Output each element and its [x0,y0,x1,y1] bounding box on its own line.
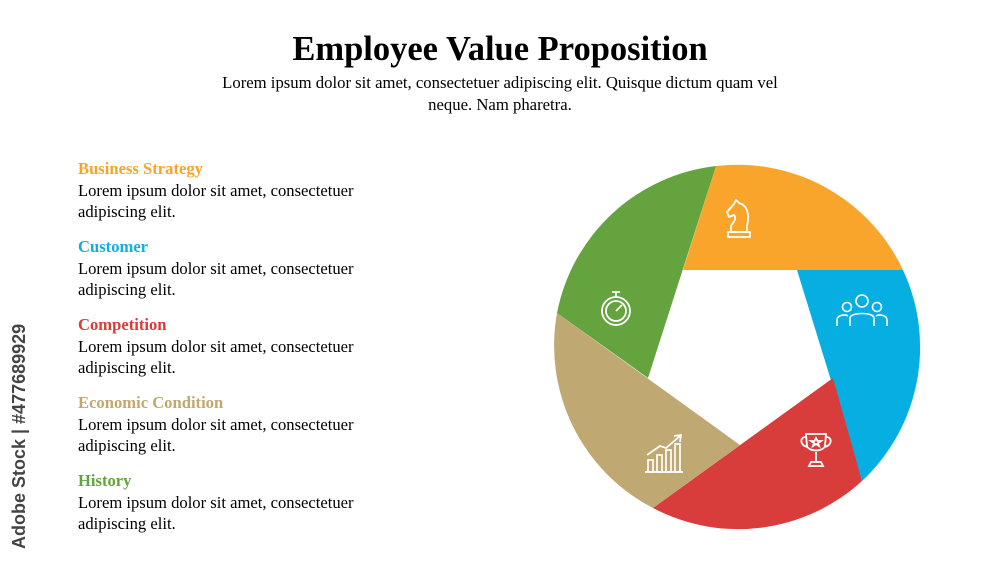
item: economic condition: Lorem ipsum dolor sit amet, consectetuer adipiscing elit. [78,414,354,455]
item: business strategy: Business Strategy [78,159,203,178]
item: customer [78,237,354,299]
segment: green [557,166,716,378]
item: business strategy [78,159,354,221]
icon: trophy [801,434,831,466]
icon: stopwatch [602,292,630,325]
segment: red [653,378,862,529]
icon: chess knight [727,200,750,237]
item: history [78,471,354,533]
watermark: Adobe Stock | #477689929 [9,324,29,549]
icon: growth chart [645,435,683,472]
item: competition: Lorem ipsum dolor sit amet, consectetuer adipiscing elit. [78,336,354,377]
item: history: Lorem ipsum dolor sit amet, consectetuer adipiscing elit. [78,492,354,533]
item: competition: Competition [78,315,166,334]
segment: orange [683,165,903,270]
item: customer: Lorem ipsum dolor sit amet, consectetuer adipiscing elit. [78,258,354,299]
segment: blue [797,270,920,481]
item: history: History [78,471,131,490]
item: economic condition: Economic Condition [78,393,223,412]
item: customer: Customer [78,237,148,256]
item: competition [78,315,354,377]
item: economic condition [78,393,354,455]
title: Employee Value Proposition [292,30,708,68]
subtitle: Lorem ipsum dolor sit amet, consectetuer adipiscing elit. Quisque dictum quam vel neque. Nam pharetra. [222,73,778,114]
item: business strategy: Lorem ipsum dolor sit amet, consectetuer adipiscing elit. [78,180,354,221]
segment: tan [554,313,740,508]
icon: people [837,295,887,326]
